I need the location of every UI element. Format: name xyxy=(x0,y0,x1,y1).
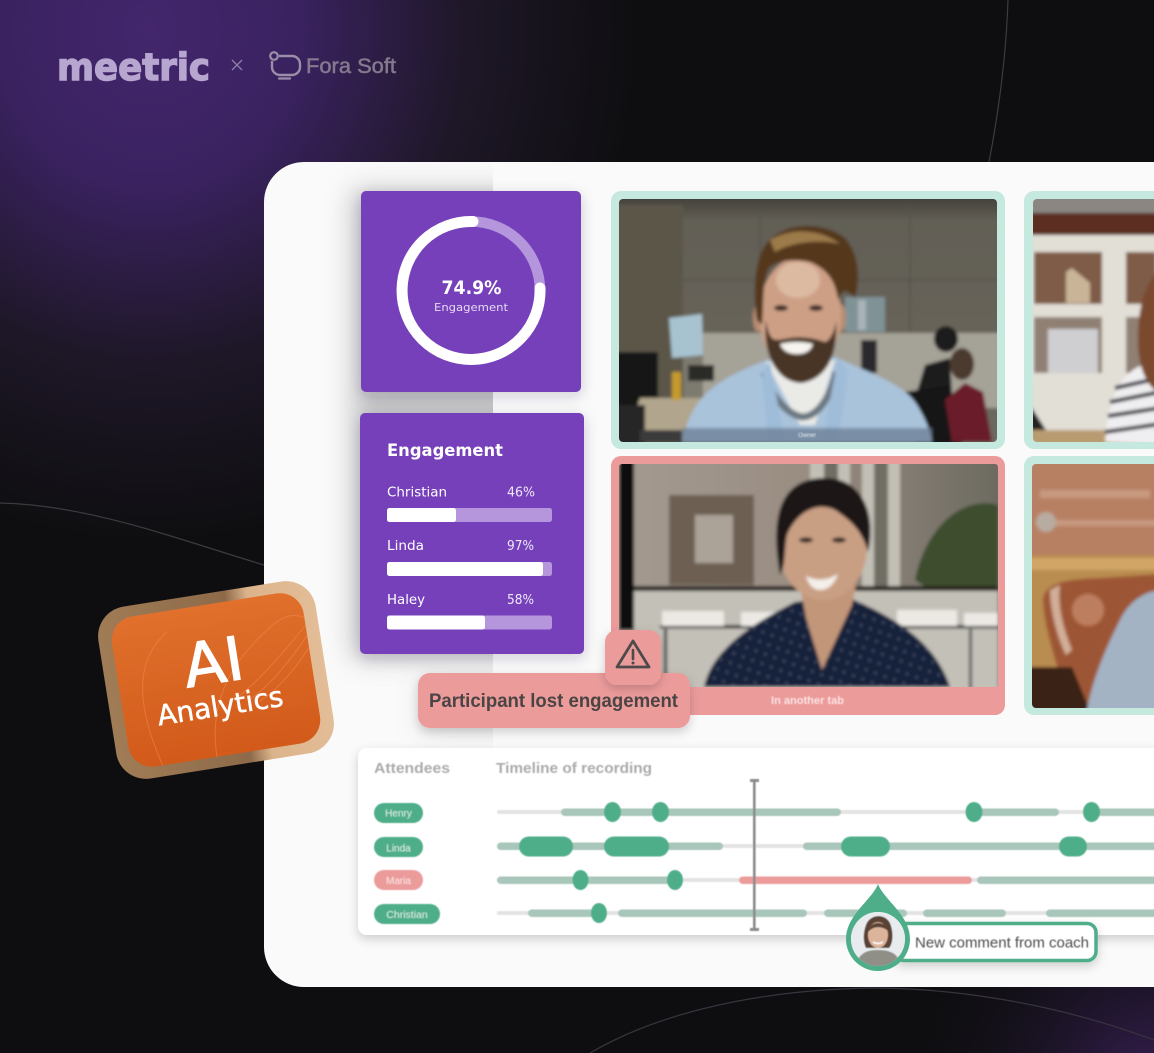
video tile: woman by bookshelves xyxy=(1024,191,1154,449)
participant name caption: Owner xyxy=(798,433,816,439)
ring label: Engagement xyxy=(434,301,509,314)
attendee: Linda xyxy=(374,837,423,857)
multiplication sign xyxy=(232,60,242,70)
row: Haley 58% xyxy=(387,593,552,630)
attendee: Henry xyxy=(374,803,423,823)
attendee: Linda: Linda xyxy=(386,844,411,854)
row: Christian 46%: Christian xyxy=(387,486,447,500)
track: Maria xyxy=(497,870,1154,890)
badge rim xyxy=(94,577,338,783)
video tile: smiling woman, flagged in pink xyxy=(611,456,1005,715)
attendee: Christian: Christian xyxy=(386,909,428,921)
badge subtitle: Analytics: Analytics xyxy=(155,680,285,732)
callout: new comment from coach xyxy=(846,884,1096,971)
attendee: Christian xyxy=(374,904,440,924)
row: Linda 97% xyxy=(387,539,552,576)
dashboard panel xyxy=(264,162,1154,987)
logo: Fora Soft: Fora Soft xyxy=(306,55,396,78)
badge title: AI: AI xyxy=(178,624,248,702)
logo: Fora Soft xyxy=(270,52,396,78)
track: Linda xyxy=(497,836,1154,856)
chart: engagement ring xyxy=(402,221,540,360)
attendee: Maria: Maria xyxy=(386,876,411,887)
card heading: Engagement xyxy=(387,441,503,460)
attendee: Henry: Henry xyxy=(385,808,412,820)
alert label: Participant lost engagement xyxy=(429,690,678,712)
ring value: 74.9% xyxy=(442,277,502,299)
track: Henry xyxy=(497,802,1154,822)
badge: AI Analytics xyxy=(94,577,338,783)
logo: meetric: meetric xyxy=(57,46,210,89)
track: Christian xyxy=(497,903,1154,923)
video tile: smiling man in office xyxy=(611,191,1005,449)
row: Linda 97%: Linda xyxy=(387,539,424,554)
alert label xyxy=(418,673,690,728)
badge face xyxy=(108,590,324,770)
alert: participant lost engagement xyxy=(418,630,690,728)
icon: warning triangle xyxy=(605,630,661,685)
panel: engagement bars card xyxy=(360,413,584,654)
tile status caption: In another tab xyxy=(771,695,844,707)
attendee: Maria xyxy=(374,870,423,890)
row: Haley 58%: Haley xyxy=(387,593,425,608)
panel: recording timeline xyxy=(358,748,1154,935)
heading: timeline of recording: Timeline of recording xyxy=(496,760,652,777)
row: Haley 58%: 58% xyxy=(507,593,534,608)
playhead xyxy=(750,779,759,931)
row: Linda 97%: 97% xyxy=(507,539,534,554)
panel: engagement ring card xyxy=(361,191,581,392)
video tile: man in leather chair xyxy=(1024,456,1154,715)
comment bubble: New comment from coach xyxy=(915,936,1089,952)
row: Christian 46%: 46% xyxy=(507,486,535,500)
coach avatar marker xyxy=(846,884,910,971)
row: Christian 46% xyxy=(387,486,552,522)
heading: attendees: Attendees xyxy=(374,760,450,777)
comment bubble xyxy=(895,924,1096,960)
